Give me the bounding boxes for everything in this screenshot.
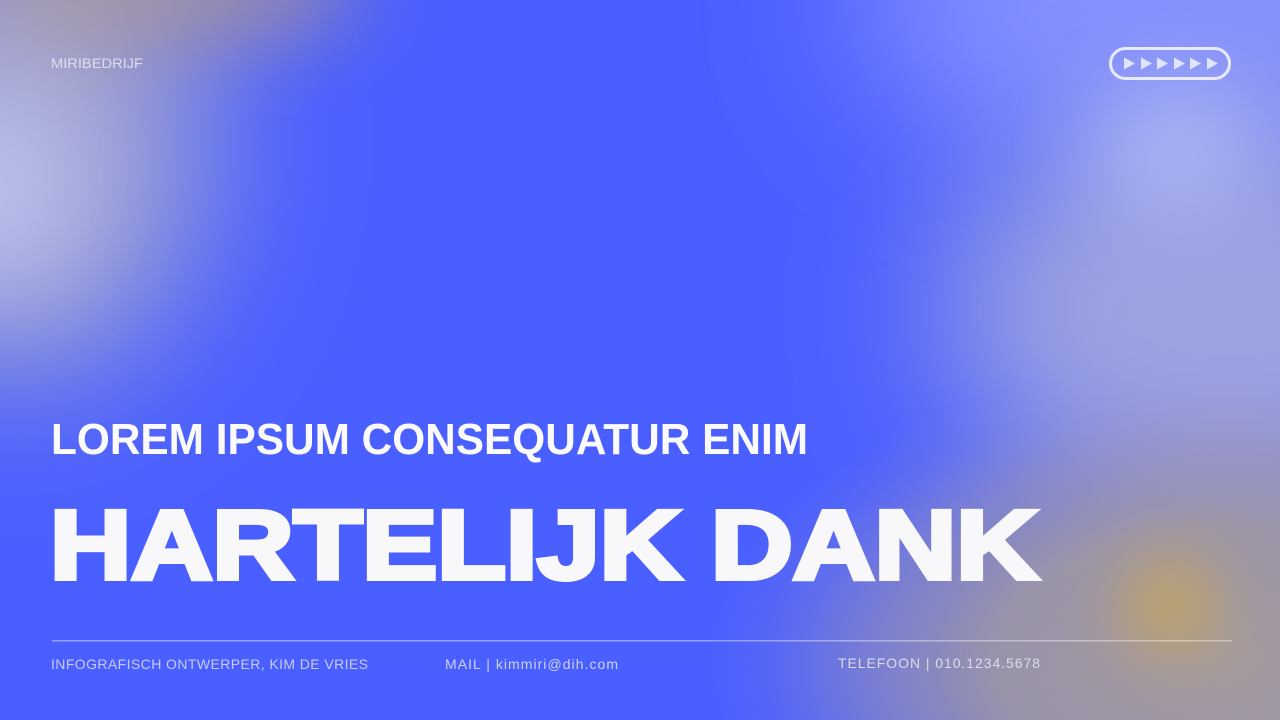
company name: MIRIBEDRIJF xyxy=(51,55,143,71)
divider line xyxy=(52,640,1232,642)
subtitle: LOREM IPSUM CONSEQUATUR ENIM xyxy=(51,415,808,464)
footer: phone: TELEFOON | 010.1234.5678 xyxy=(838,655,1040,671)
icon: pill with arrows xyxy=(1110,48,1230,78)
footer: designer: INFOGRAFISCH ONTWERPER, KIM DE VRIES xyxy=(51,656,368,672)
main title: HARTELIJK xyxy=(50,490,681,600)
footer: mail: MAIL | kimmiri@dih.com xyxy=(445,656,618,672)
main title xyxy=(50,490,1038,600)
main title: DANK xyxy=(711,490,1038,600)
